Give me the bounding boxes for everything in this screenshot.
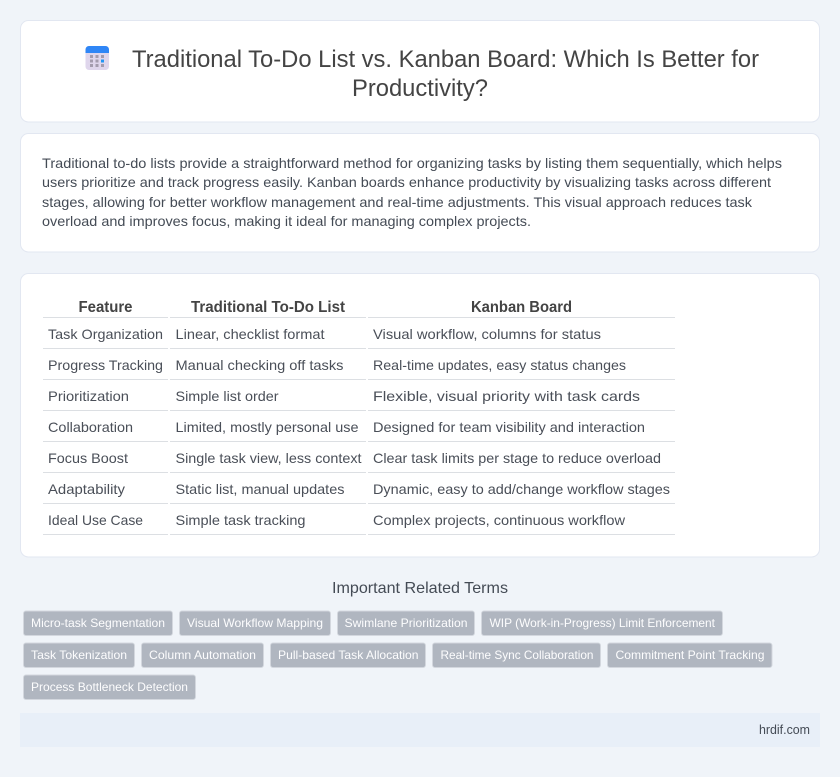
chip: Micro-task Segmentation: Micro-task Segmentation	[31, 616, 165, 630]
table row: Adaptability: Dynamic, easy to add/change workflow stages	[373, 481, 670, 497]
table row: Task Organization: Visual workflow, columns for status	[373, 326, 601, 342]
chip: Real-time Sync Collaboration	[432, 643, 600, 668]
chip: Commitment Point Tracking	[608, 643, 772, 668]
footer source: hrdif.com	[759, 723, 810, 737]
table row: Focus Boost: Clear task limits per stage to reduce overload	[373, 450, 661, 466]
chip: Column Automation: Column Automation	[149, 648, 256, 662]
table row: Progress Tracking: Progress Tracking	[48, 357, 163, 373]
table row: Prioritization	[48, 388, 640, 404]
title	[132, 46, 759, 102]
table row: Progress Tracking	[48, 357, 626, 373]
chip: Process Bottleneck Detection	[24, 675, 196, 700]
table row: Ideal Use Case: Complex projects, continuous workflow	[373, 512, 626, 528]
chip: Process Bottleneck Detection: Process Bottleneck Detection	[31, 680, 188, 694]
table row: Task Organization: Linear, checklist format	[176, 326, 325, 342]
table row: Adaptability	[48, 481, 670, 497]
chip: Task Tokenization	[24, 643, 134, 668]
text block: introduction: users prioritize and track progress easily. Kanban boards enhance productivity by visualizing tasks across different	[42, 174, 771, 190]
table row: Ideal Use Case: Simple task tracking	[176, 512, 306, 528]
table header: Traditional To-Do List	[191, 299, 345, 316]
table row: Collaboration: Limited, mostly personal use	[176, 419, 359, 435]
table row: Progress Tracking: Real-time updates, easy status changes	[373, 357, 626, 373]
table row: Adaptability: Adaptability	[48, 481, 125, 497]
panel: introduction	[20, 134, 820, 252]
table row: Ideal Use Case	[48, 512, 626, 528]
chip: Visual Workflow Mapping	[180, 611, 330, 636]
chip: Visual Workflow Mapping: Visual Workflow Mapping	[187, 616, 323, 630]
panel: header	[20, 20, 820, 122]
table row: Adaptability: Static list, manual updates	[176, 481, 344, 497]
table row: Collaboration: Designed for team visibility and interaction	[373, 419, 645, 435]
table row: Progress Tracking: Manual checking off tasks	[176, 357, 344, 373]
table row: Collaboration: Collaboration	[48, 419, 133, 435]
text block: introduction: overload and improves focus, making it ideal for managing complex projects.	[42, 213, 531, 229]
text block: introduction	[42, 155, 782, 229]
table row: Prioritization: Simple list order	[176, 388, 279, 404]
chip: WIP Limit Enforcement: WIP (Work-in-Progress) Limit Enforcement	[490, 616, 716, 630]
table row: Collaboration	[48, 419, 645, 435]
footer	[20, 713, 820, 747]
table row: Focus Boost: Focus Boost	[48, 450, 128, 466]
table row: Focus Boost: Single task view, less context	[176, 450, 362, 466]
panel: comparison table	[20, 274, 820, 557]
title: Traditional To-Do List vs. Kanban Board: Which Is Better for	[132, 46, 759, 73]
text block: introduction: Traditional to-do lists provide a straightforward method for organizing tasks by listing them sequentially, which helps	[42, 155, 782, 171]
table row: Prioritization: Flexible, visual priority with task cards	[373, 388, 640, 404]
chip: Swimlane Prioritization	[338, 611, 474, 636]
table header: Kanban Board	[471, 299, 572, 316]
title: Productivity?	[352, 75, 488, 102]
table row: Ideal Use Case: Ideal Use Case	[48, 512, 143, 528]
table header	[78, 299, 572, 316]
table row: Prioritization: Prioritization	[48, 388, 129, 404]
chip: Micro-task Segmentation	[24, 611, 172, 636]
chip: Swimlane Prioritization: Swimlane Prioritization	[344, 616, 468, 630]
text block: introduction: stages, allowing for better workflow management and real-time adjustments. This visual approach reduces task	[42, 194, 753, 210]
chip: Pull-based Task Allocation	[270, 643, 426, 668]
chip: WIP Limit Enforcement	[482, 611, 722, 636]
table header: Feature	[78, 299, 133, 316]
table row: Focus Boost	[48, 450, 661, 466]
icon: calendar	[86, 46, 109, 70]
related term chips	[24, 611, 772, 700]
chip: Pull-based Task Allocation: Pull-based Task Allocation	[278, 648, 418, 662]
table row: Task Organization: Task Organization	[48, 326, 163, 342]
chip: Task Tokenization: Task Tokenization	[31, 648, 127, 662]
chip: Column Automation	[142, 643, 264, 668]
table row: Task Organization	[48, 326, 601, 342]
chip: Commitment Point Tracking: Commitment Point Tracking	[616, 648, 764, 662]
heading: related terms: Important Related Terms	[332, 580, 508, 597]
chip: Real-time Sync Collaboration: Real-time Sync Collaboration	[440, 648, 594, 662]
